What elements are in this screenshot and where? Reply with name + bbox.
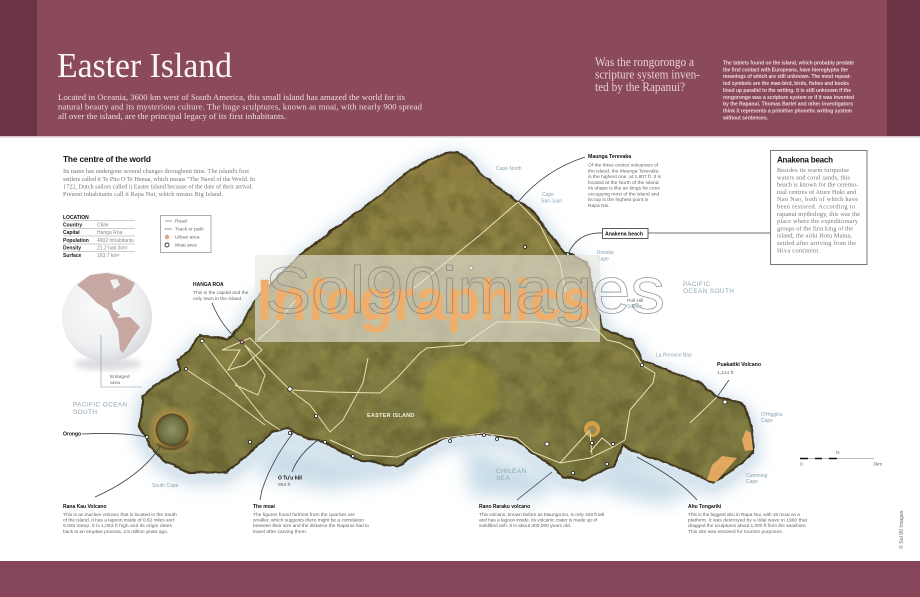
label: Maunga Terevaka: is the highest one, at 1,807 ft. It is [588, 174, 662, 180]
watermark: Infographics: Infographics [257, 268, 592, 333]
globe: Americas [77, 273, 140, 353]
label: Anakena beach tag: Anakena beach [605, 232, 643, 238]
note: Rano Raraku volcano [479, 504, 604, 529]
scale bar [800, 450, 882, 468]
ocean and place labels: Rosalia [597, 250, 614, 256]
ocean and place labels: CHILEAN [496, 468, 526, 475]
side text: by the Rapanui. Thomas Bartel and other investigators [723, 102, 853, 108]
panel: Anakena beach: waters and coral sands, this [777, 174, 851, 181]
label: Hanga Roa [193, 282, 249, 302]
label: O Tu'u hill: O Tu'u hill [278, 476, 302, 482]
note: Rana Kau Volcano: This is an inactive volcano that is located in the South [63, 512, 177, 518]
note: The moai: smaller, which suggests there might be a correlation [253, 518, 364, 524]
intro text [58, 92, 423, 121]
scale bar: 0 [800, 462, 803, 468]
text: the centre of the world [63, 168, 256, 198]
side text [722, 60, 854, 121]
label: Hanga Roa: HANGA ROA [193, 282, 224, 288]
label: Maunga Terevaka: located at the North of the island. [588, 180, 660, 186]
intro text: natural beauty and its mysterious culture. The huge sculptures, known as moai, with nearly 900 spread [58, 102, 423, 112]
panel: Anakena beach: island, the ariki Hotu Matua, [777, 233, 852, 240]
terrain: Rana Kau crater [149, 407, 195, 453]
location table: Surface [63, 253, 82, 259]
label: Maunga Terevaka: Of the three extinct volcanoes of [588, 162, 659, 168]
terrain: beaches [707, 430, 753, 482]
side text: meanings of which are still unknown. The most repeat- [723, 74, 851, 80]
title: Easter Island [57, 46, 232, 85]
roads [187, 202, 717, 463]
ocean and place labels [73, 166, 783, 489]
label: Hanga Roa: This is the capital and the [193, 290, 249, 296]
ocean and place labels: PACIFIC OCEAN [73, 402, 127, 408]
note: Rana Kau Volcano: Rana Kau Volcano [63, 504, 107, 510]
ocean and place labels: PACIFIC [683, 281, 711, 288]
note: Rana Kau Volcano: of the island. It has a lagoon inside of 0.62 miles and [63, 518, 174, 524]
map: island terrain [140, 152, 753, 483]
note: Rana Kau Volcano: back to an eruptive process, 2.5 million years ago. [63, 529, 168, 535]
panel: Anakena beach: been restored. According to [777, 204, 855, 210]
panel: Anakena beach: Nao Nao, both of which have [777, 196, 858, 203]
label: Maunga Terevaka: Maunga Terevaka [588, 154, 631, 160]
location table: 163.7 km² [97, 253, 120, 259]
label: Maunga Terevaka [588, 154, 662, 209]
enlarged area marker: Enlarged [110, 374, 130, 380]
location table: 21.2 hab./km² [97, 246, 128, 252]
side question: Was the rongorongo a [595, 55, 695, 69]
watermark: Sol90images: Sol90images [265, 253, 665, 327]
header side bars [0, 0, 920, 136]
image credit: © Sol 90 Images [898, 510, 905, 549]
note: Rano Raraku volcano: and has a lagoon inside. Its volcanic crater is made up of [479, 518, 598, 524]
side text: think it represents a primitive phonetic writing system [723, 108, 853, 114]
note: Ahu Tongariki: This site was restored for tourism purposes. [688, 529, 783, 535]
footer band [0, 561, 920, 597]
label: Maunga Terevaka: the island, the Maunga Terevaka [588, 168, 659, 174]
ocean and place labels: Poll Hill [627, 298, 643, 304]
intro text: Located in Oceania, 3600 km west of South America, this small island has amazed the world for its [58, 92, 406, 102]
map legend: Road [175, 218, 187, 224]
label: Maunga Terevaka: Rapa Nui. [588, 203, 610, 209]
ocean and place labels: Cape [746, 479, 758, 485]
side text: the first contact with Europeans, have hieroglyphs the [723, 67, 848, 73]
panel: Anakena beach: Besides its warm turquoise [777, 167, 849, 174]
side question: ted by the Rapanui? [595, 80, 685, 94]
location table: Chile [97, 222, 109, 228]
ocean and place labels: La Perouse Bay [656, 352, 692, 358]
side text: rongorongo was a scripture system or if it was invented [723, 95, 854, 101]
side question [595, 55, 700, 94]
ocean and place labels: South Cape [152, 483, 179, 489]
side text: ted symbols are the man-bird, birds, fishes and books [723, 81, 849, 87]
note: The moai: The moai [253, 504, 276, 510]
ocean and place labels: SEA [496, 475, 510, 482]
panel: Anakena beach: settled after arriving from the [777, 240, 856, 247]
panel: Anakena beach [770, 150, 867, 264]
panel: Anakena beach: nial centres of Ature Huki and [777, 189, 857, 196]
ocean and place labels: Cape [542, 192, 554, 198]
note: Ahu Tongariki: dragged the sculptures about 1,000 ft from the seashore. [688, 523, 807, 529]
label: O Tu'u hill: 984 ft [278, 482, 291, 488]
panel: Anakena beach: Hiva continent. [777, 247, 820, 254]
text: the centre of the world: Its name has undergone several changes throughout time. The island's first [63, 168, 249, 175]
ocean and place labels: SOUTH [73, 409, 97, 416]
watermark band [255, 255, 600, 342]
sea halo around the island [140, 156, 753, 505]
ocean and place labels: Cape [597, 256, 609, 262]
note: Ahu Tongariki [688, 504, 808, 535]
map legend: Track or path [175, 226, 204, 232]
note: Rano Raraku volcano: Rano Raraku volcano [479, 504, 530, 510]
scale bar: 3km [873, 462, 882, 468]
callout leader lines [82, 157, 770, 500]
location table: Population [63, 238, 89, 244]
side question: scripture system inven- [595, 68, 700, 82]
note: The moai: The figures found furthest from the quarries are [253, 512, 355, 518]
location table: Capital [63, 230, 80, 236]
ocean and place labels: O'Higgins [761, 412, 783, 418]
ocean and place labels: Cumming [746, 473, 768, 479]
note: Rana Kau Volcano [63, 504, 177, 535]
label: Puakatiki Volcano: Puakatiki Volcano [717, 362, 761, 368]
panel: Anakena beach: Anakena beach [777, 156, 833, 164]
label: Maunga Terevaka: occupying most of the island and [588, 191, 660, 197]
map legend [160, 216, 211, 252]
heading: the centre of the world: The centre of the world [63, 154, 151, 164]
scale bar: N [836, 450, 840, 456]
intro text: all over the island, are the principal legacy of its first inhabitants. [58, 111, 286, 121]
ocean and place labels: OCEAN SOUTH [683, 288, 734, 295]
panel: Anakena beach: rapanui mythology, this was the [777, 211, 860, 218]
note: Rano Raraku volcano: This volcano, known before as Maunga Eo, is only 328 ft tall [479, 512, 604, 518]
location table: LOCATION [63, 215, 89, 221]
note: The moai: travel after carving them. [253, 529, 307, 535]
location table [63, 215, 135, 259]
location table: Country [63, 222, 82, 228]
label: Anakena beach tag [602, 228, 648, 238]
ocean and place labels: Cape North [496, 166, 522, 172]
ocean and place labels: San Juan [541, 198, 562, 204]
note: Ahu Tongariki: Ahu Tongariki [688, 504, 722, 510]
label: Puakatiki Volcano [717, 362, 761, 376]
panel: Anakena beach: beach is known for the ceremo- [777, 182, 858, 189]
globe: Hudson Bay [110, 279, 120, 289]
ocean and place labels: Cape [761, 418, 773, 424]
side text: lined up parallel to the writing. It is still unknown if the [723, 88, 851, 94]
label: Hanga Roa: only town in the island. [193, 296, 242, 302]
locator globe [62, 272, 152, 370]
note: Ahu Tongariki: platform. It was destroyed by a tidal wave in 1960 that [688, 518, 808, 524]
terrain: Rano Raraku crater [584, 421, 600, 437]
location table: 4902 inhabitants [97, 238, 134, 244]
note: Rana Kau Volcano: 9,081 steep. It is 1,063 ft high and its origin dates [63, 523, 173, 529]
side text: The tablets found on the island, which probably predate [723, 60, 854, 66]
terrain: yellow plain patch [422, 357, 498, 427]
location table: Density [63, 246, 81, 252]
enlarged area marker: area [110, 380, 120, 386]
label: Maunga Terevaka: its top is the highest point in [588, 197, 649, 203]
label: O Tu'u hill [278, 476, 302, 488]
text: the centre of the world: 1722, Dutch sailors called it Easter Island because of the date of their arrival. [63, 184, 253, 190]
note: The moai: between their size and the distance the Rapanui had to [253, 523, 369, 529]
map points [146, 246, 727, 475]
label: Puakatiki Volcano: 1,214 ft [717, 370, 734, 376]
panel: Anakena beach: groups of the first king of the [777, 225, 853, 232]
header band [0, 0, 920, 138]
note: Ahu Tongariki: This is the biggest ahu in Rapa Nui, with 15 moai on a [688, 512, 800, 518]
text: the centre of the world: settlers called it Te Pito O Te Henua, which means "The Navel of the World. In [63, 176, 256, 183]
location table: Hanga Roa [97, 230, 123, 236]
panel: Anakena beach: place where the expeditionary [777, 218, 859, 225]
label: Maunga Terevaka: Its shape is like an kings fur cone [588, 186, 660, 192]
note: The moai [253, 504, 369, 535]
side text: without sentences. [722, 115, 769, 121]
label: Orongo: Orongo [63, 432, 81, 438]
ocean and place labels: EASTER ISLAND [367, 413, 415, 419]
map legend: Urban area [175, 234, 200, 240]
ocean and place labels: Station [627, 304, 643, 310]
text: the centre of the world: Present inhabitants call it Rapa Nui, which means Big Island. [63, 191, 223, 198]
note: Rano Raraku volcano: solidified ash. It is about 300,000 years old. [479, 523, 571, 529]
map legend: Moai area [175, 242, 197, 248]
enlarged area marker [101, 335, 142, 387]
